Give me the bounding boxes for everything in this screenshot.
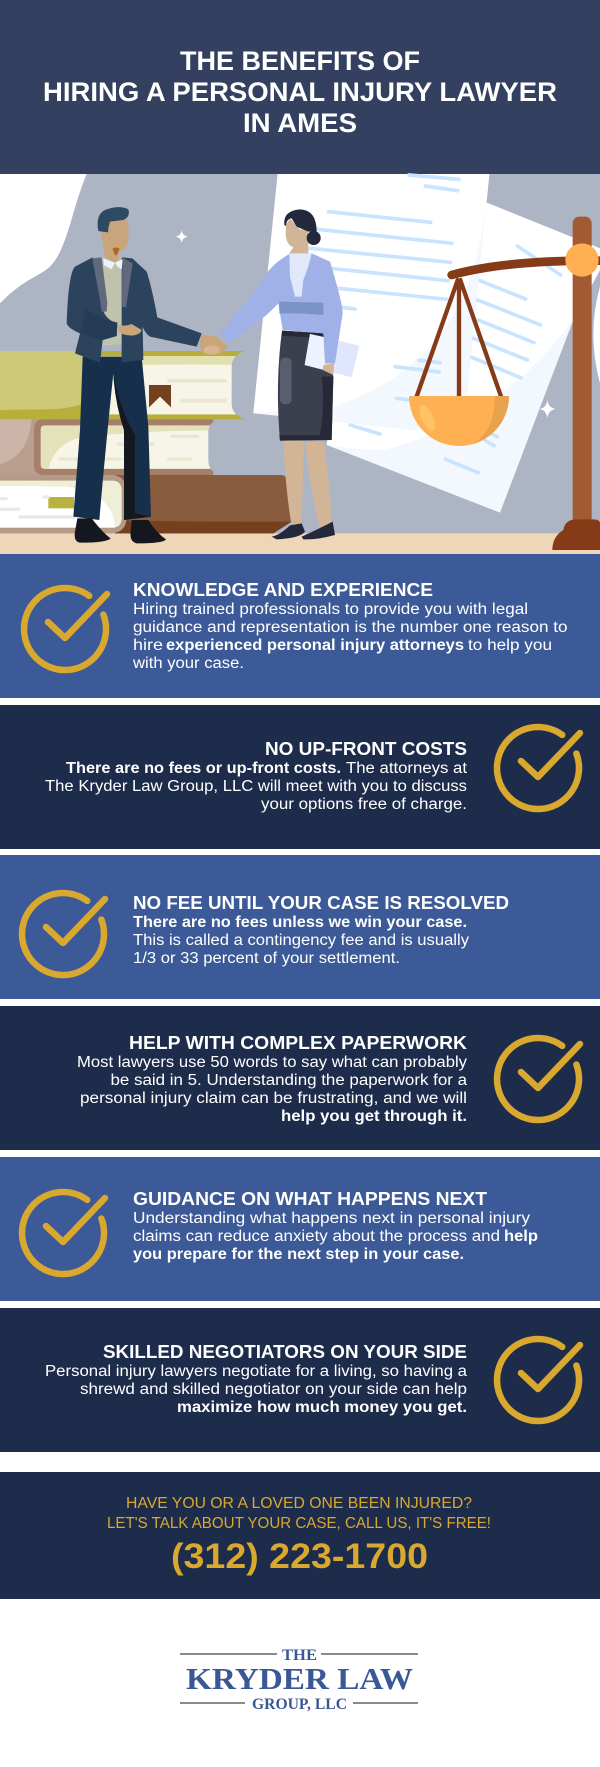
handshake	[199, 335, 228, 355]
body text: There are no fees or up-front costs.	[66, 760, 341, 777]
icon: check circle	[24, 588, 107, 670]
panel: knowledge and experience	[0, 554, 600, 698]
body text: your options free of charge.	[261, 796, 467, 813]
call to action text: HAVE YOU OR A LOVED ONE BEEN INJURED?	[126, 1495, 472, 1512]
lawyer figure	[67, 207, 202, 543]
strings	[416, 278, 502, 398]
body text: hire	[133, 637, 163, 654]
header banner	[0, 0, 600, 174]
folder	[305, 334, 359, 377]
sweater vest	[101, 257, 124, 346]
title: IN AMES	[243, 108, 357, 138]
call to action text	[107, 1495, 491, 1532]
body text	[77, 1054, 467, 1125]
bookmark	[149, 385, 171, 407]
skirt	[278, 331, 333, 441]
head	[100, 219, 129, 263]
hand	[323, 363, 334, 375]
heading: HELP WITH COMPLEX PAPERWORK	[129, 1032, 468, 1053]
lapels	[92, 257, 107, 312]
ground	[0, 533, 600, 554]
panel: help with complex paperwork	[0, 1006, 600, 1150]
head	[286, 218, 308, 253]
logo: The Kryder Law Group, LLC: GROUP, LLC	[252, 1696, 347, 1713]
body text: experienced personal injury attorneys	[166, 637, 464, 654]
body text	[133, 1210, 538, 1263]
body text: The attorneys at	[346, 760, 468, 777]
body text: be said in 5. Understanding the paperwork for a	[110, 1072, 467, 1089]
icon: check circle	[497, 727, 580, 809]
hand	[118, 324, 142, 336]
shoes	[272, 523, 305, 539]
bottom brown book	[115, 475, 292, 533]
body text: claims can reduce anxiety about the process and	[133, 1228, 500, 1245]
heading: SKILLED NEGOTIATORS ON YOUR SIDE	[103, 1341, 467, 1362]
heading: GUIDANCE ON WHAT HAPPENS NEXT	[133, 1188, 488, 1209]
panel: no fee until your case is resolved	[0, 855, 600, 999]
scales of justice	[409, 217, 600, 550]
beam	[452, 261, 600, 275]
logo: The Kryder Law Group, LLC: THE	[282, 1647, 317, 1664]
jacket	[67, 257, 117, 363]
stack of books	[0, 351, 292, 533]
bottom white book	[0, 475, 127, 533]
body text: The Kryder Law Group, LLC will meet with you to discuss	[45, 778, 467, 795]
collar	[103, 258, 123, 269]
heading: NO UP-FRONT COSTS	[265, 738, 467, 759]
body text: maximize how much money you get.	[177, 1399, 467, 1416]
body text: 1/3 or 33 percent of your settlement.	[133, 950, 400, 967]
body text: with your case.	[132, 655, 244, 672]
icon: check circle	[22, 1192, 105, 1274]
middle book	[0, 419, 290, 475]
body text: you prepare for the next step in your case.	[133, 1246, 464, 1263]
documents	[253, 174, 600, 513]
base	[552, 519, 600, 550]
body text: personal injury claim can be frustrating, and we will	[80, 1090, 467, 1107]
sparkle	[175, 230, 188, 243]
body text: Hiring trained professionals to provide you with legal	[133, 601, 528, 618]
body text: Understanding what happens next in personal injury	[133, 1210, 530, 1227]
sparkle	[539, 400, 556, 418]
call to action band	[0, 1472, 600, 1599]
title	[43, 46, 557, 138]
phone number: (312) 223-1700	[171, 1537, 428, 1576]
top book	[0, 351, 248, 419]
pivot	[565, 243, 599, 277]
icon: check circle	[497, 1038, 580, 1120]
heading: KNOWLEDGE AND EXPERIENCE	[133, 579, 433, 600]
pan	[409, 396, 509, 446]
body text: Personal injury lawyers negotiate for a living, so having a	[45, 1363, 467, 1380]
body text	[45, 760, 468, 813]
body text: help you get through it.	[281, 1108, 467, 1125]
panel: no up-front costs	[0, 705, 600, 849]
body text: Most lawyers use 50 words to say what can probably	[77, 1054, 467, 1071]
body text: There are no fees unless we win your case.	[133, 914, 467, 931]
title: HIRING A PERSONAL INJURY LAWYER	[43, 77, 557, 107]
pole	[573, 217, 592, 525]
panel: guidance on what happens next	[0, 1157, 600, 1301]
heading: NO FEE UNTIL YOUR CASE IS RESOLVED	[133, 892, 509, 913]
blouse	[220, 253, 343, 363]
icon: check circle	[22, 893, 105, 975]
body text: This is called a contingency fee and is usually	[133, 932, 469, 949]
icon: check circle	[497, 1339, 580, 1421]
call to action text: LET'S TALK ABOUT YOUR CASE, CALL US, IT'S FREE!	[107, 1515, 491, 1532]
body text: help	[504, 1228, 538, 1245]
body text: to help you	[468, 637, 552, 654]
trousers	[73, 357, 151, 520]
body text	[45, 1363, 467, 1416]
body text	[133, 914, 469, 967]
body text: guidance and representation is the number one reason to	[133, 619, 568, 636]
legs	[283, 441, 304, 526]
body text	[132, 601, 568, 672]
logo: The Kryder Law Group, LLC: KRYDER LAW	[186, 1661, 413, 1696]
title: THE BENEFITS OF	[180, 46, 420, 76]
shoes	[75, 518, 111, 543]
panel: skilled negotiators on your side	[0, 1308, 600, 1452]
body text: shrewd and skilled negotiator on your side can help	[80, 1381, 467, 1398]
logo: The Kryder Law Group, LLC	[180, 1647, 418, 1713]
client figure	[220, 209, 359, 539]
illustration: lawyer and client shaking hands with books and scales	[0, 174, 600, 554]
